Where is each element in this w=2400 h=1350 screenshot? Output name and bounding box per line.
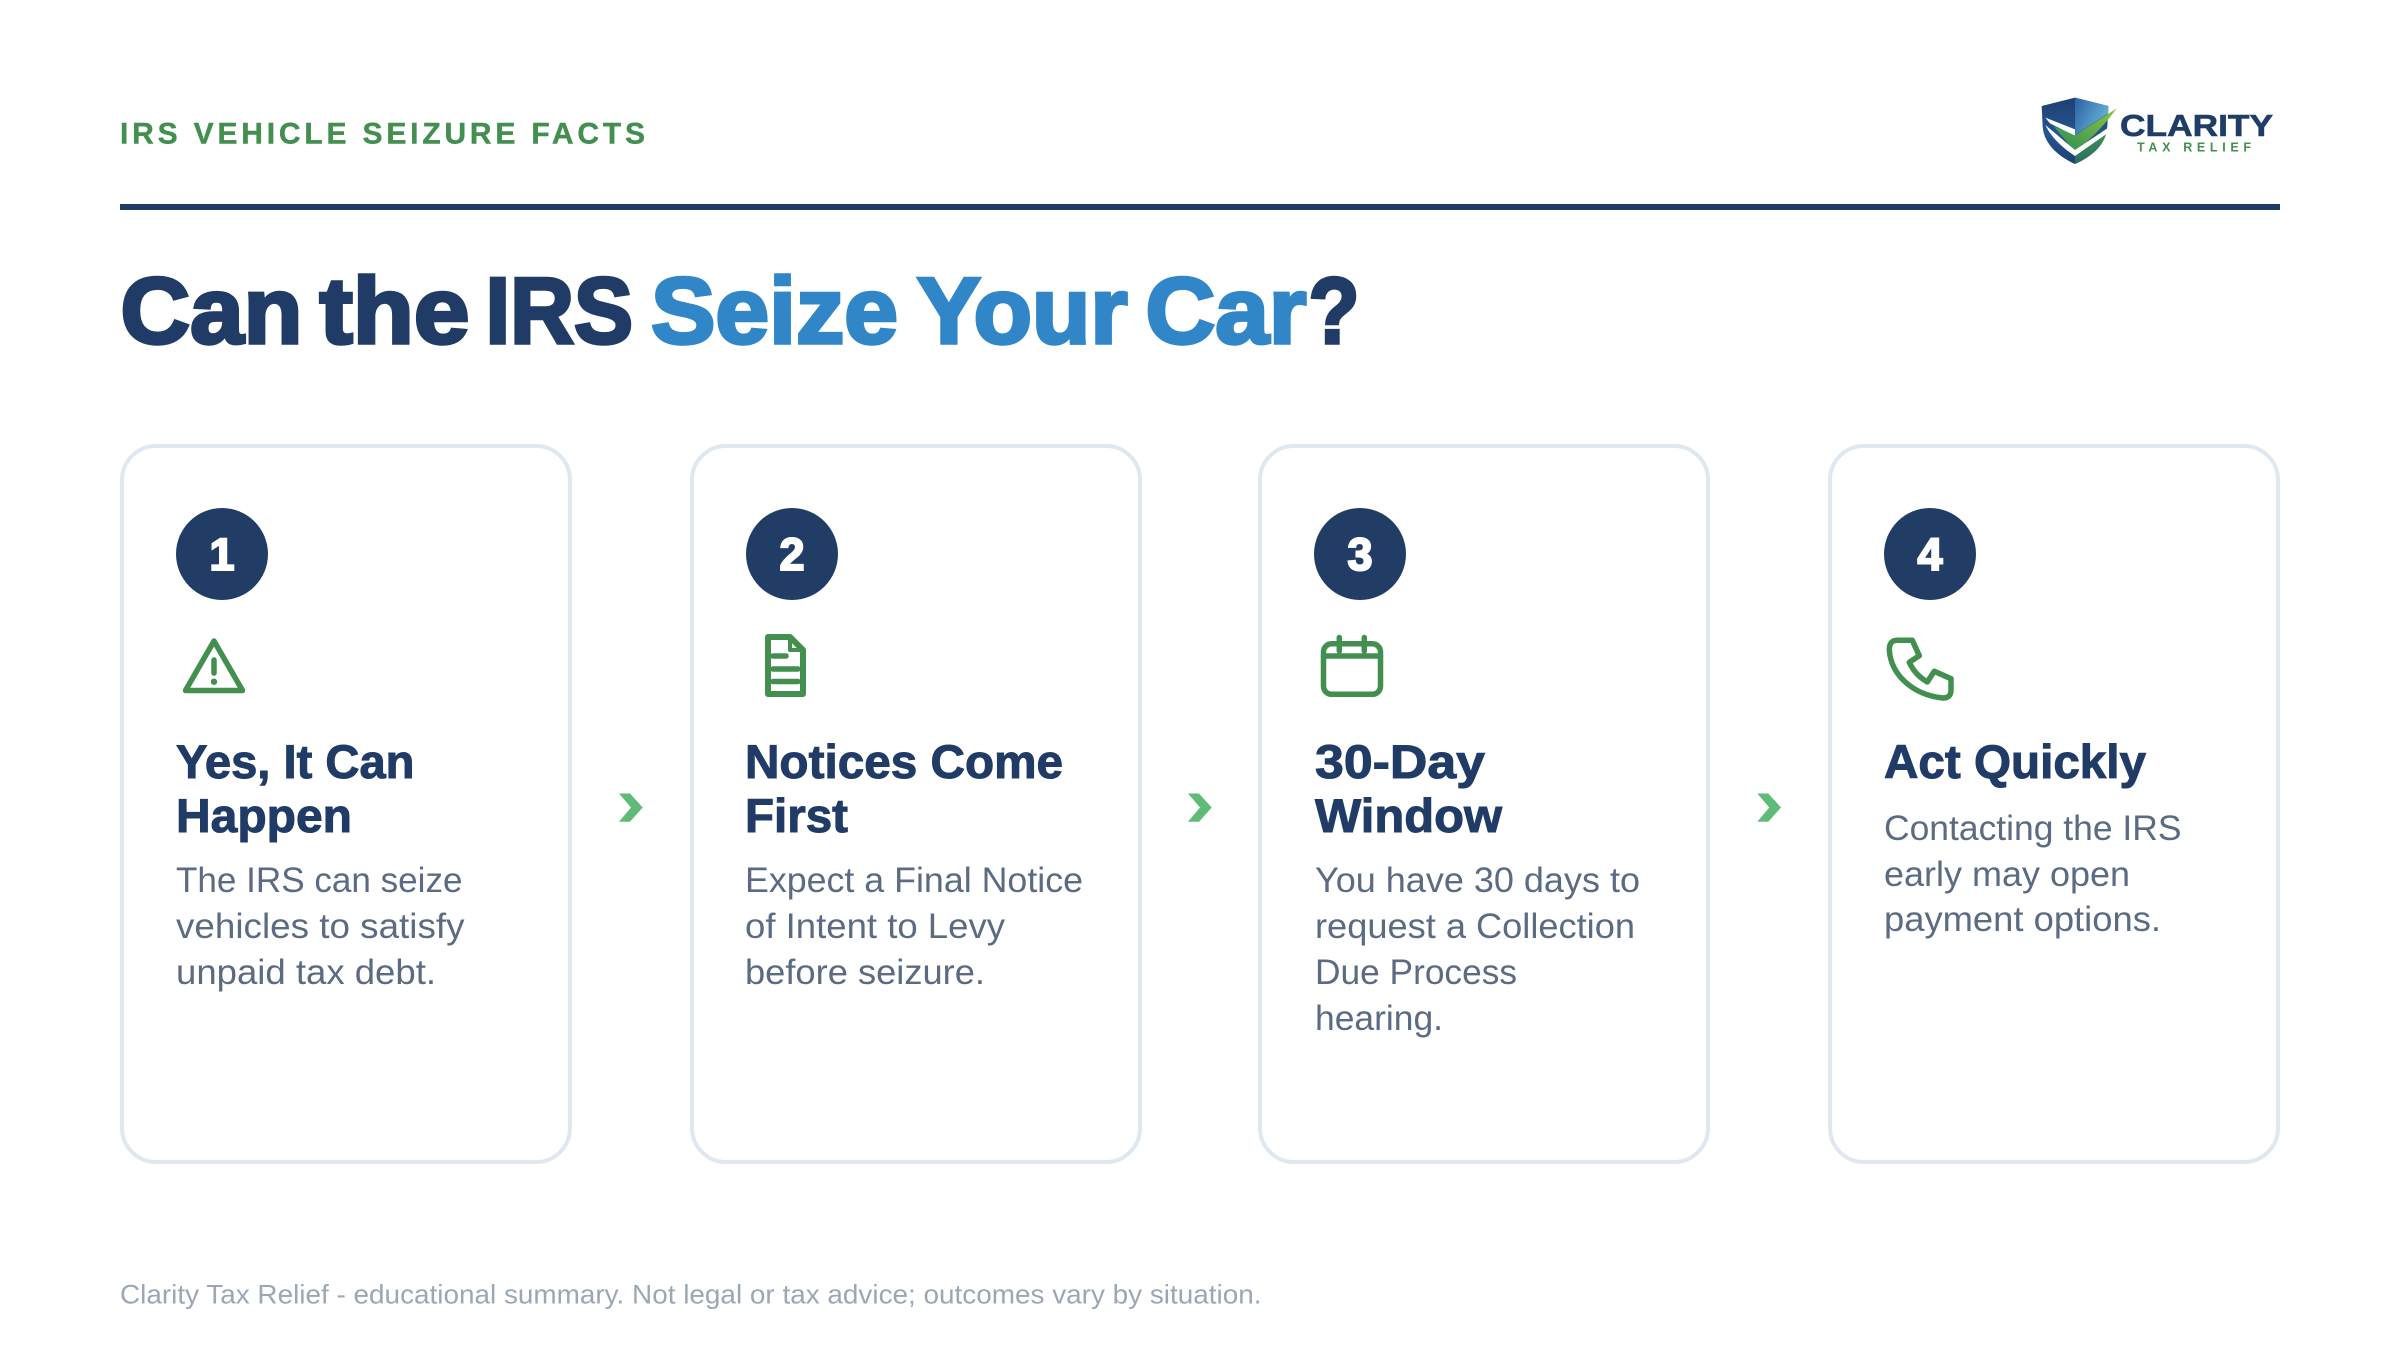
card body text: payment options. bbox=[1884, 900, 2161, 939]
card body text bbox=[1315, 861, 1640, 1038]
card heading bbox=[745, 736, 1063, 843]
card body text: You have 30 days to bbox=[1315, 861, 1640, 900]
title: Can bbox=[120, 258, 302, 363]
card body text: Expect a Final Notice bbox=[745, 861, 1083, 900]
logo wordmark: CLARITY bbox=[2120, 108, 2273, 143]
arrow 1 bbox=[619, 794, 643, 822]
logo tagline: TAX RELIEF bbox=[2137, 141, 2251, 155]
card body text bbox=[1884, 809, 2182, 939]
icon: calendar bbox=[1324, 638, 1380, 694]
step number 2 bbox=[746, 508, 838, 600]
panel: card 4 bbox=[1830, 446, 2278, 1162]
card heading: Notices Come bbox=[745, 736, 1063, 789]
card body text: request a Collection bbox=[1315, 907, 1635, 946]
icon: document bbox=[768, 637, 803, 694]
card body text: unpaid tax debt. bbox=[176, 953, 436, 992]
icon: shield with checkmark bbox=[2042, 98, 2117, 164]
card heading bbox=[176, 736, 414, 843]
title: Your bbox=[917, 258, 1128, 363]
step number 4 bbox=[1884, 508, 1976, 600]
title: the bbox=[320, 258, 470, 363]
card body text: vehicles to satisfy bbox=[176, 907, 465, 946]
card body text: Due Process bbox=[1315, 953, 1517, 992]
title: Seize bbox=[651, 258, 898, 363]
card body text bbox=[745, 861, 1083, 992]
title: Car bbox=[1146, 258, 1306, 363]
panel: card 1 bbox=[122, 446, 570, 1162]
step number 3 bbox=[1314, 508, 1406, 600]
step number 1: 1 bbox=[209, 529, 235, 580]
card heading: 30-Day bbox=[1315, 736, 1486, 789]
step number 3: 3 bbox=[1347, 529, 1373, 580]
logo: Clarity Tax Relief bbox=[2042, 98, 2273, 164]
eyebrow heading: IRS VEHICLE SEIZURE FACTS bbox=[120, 118, 645, 151]
step number 2: 2 bbox=[779, 529, 805, 580]
step number 4: 4 bbox=[1917, 529, 1943, 580]
panel: card 2 bbox=[692, 446, 1140, 1162]
footer disclaimer: Clarity Tax Relief - educational summary. Not legal or tax advice; outcomes vary by situation. bbox=[120, 1280, 1262, 1310]
card body text: of Intent to Levy bbox=[745, 907, 1006, 946]
arrow 3 bbox=[1757, 794, 1781, 822]
card body text: The IRS can seize bbox=[176, 861, 462, 900]
card heading: Act Quickly bbox=[1884, 736, 2147, 789]
card body text: hearing. bbox=[1315, 999, 1443, 1038]
title bbox=[120, 258, 1360, 363]
panel: card 3 bbox=[1260, 446, 1708, 1162]
arrow 2 bbox=[1188, 794, 1212, 822]
icon: warning triangle bbox=[186, 641, 242, 690]
card heading: Yes, It Can bbox=[176, 736, 414, 789]
card body text bbox=[176, 861, 465, 992]
card heading: Window bbox=[1315, 790, 1503, 843]
card heading bbox=[1315, 736, 1503, 843]
card body text: before seizure. bbox=[745, 953, 985, 992]
card body text: early may open bbox=[1884, 855, 2130, 894]
card body text: Contacting the IRS bbox=[1884, 809, 2182, 848]
icon: phone bbox=[1889, 640, 1951, 698]
card heading: First bbox=[745, 790, 848, 843]
step number 1 bbox=[176, 508, 268, 600]
title: ? bbox=[1308, 258, 1360, 363]
title: IRS bbox=[486, 258, 633, 363]
card heading: Happen bbox=[176, 790, 352, 843]
